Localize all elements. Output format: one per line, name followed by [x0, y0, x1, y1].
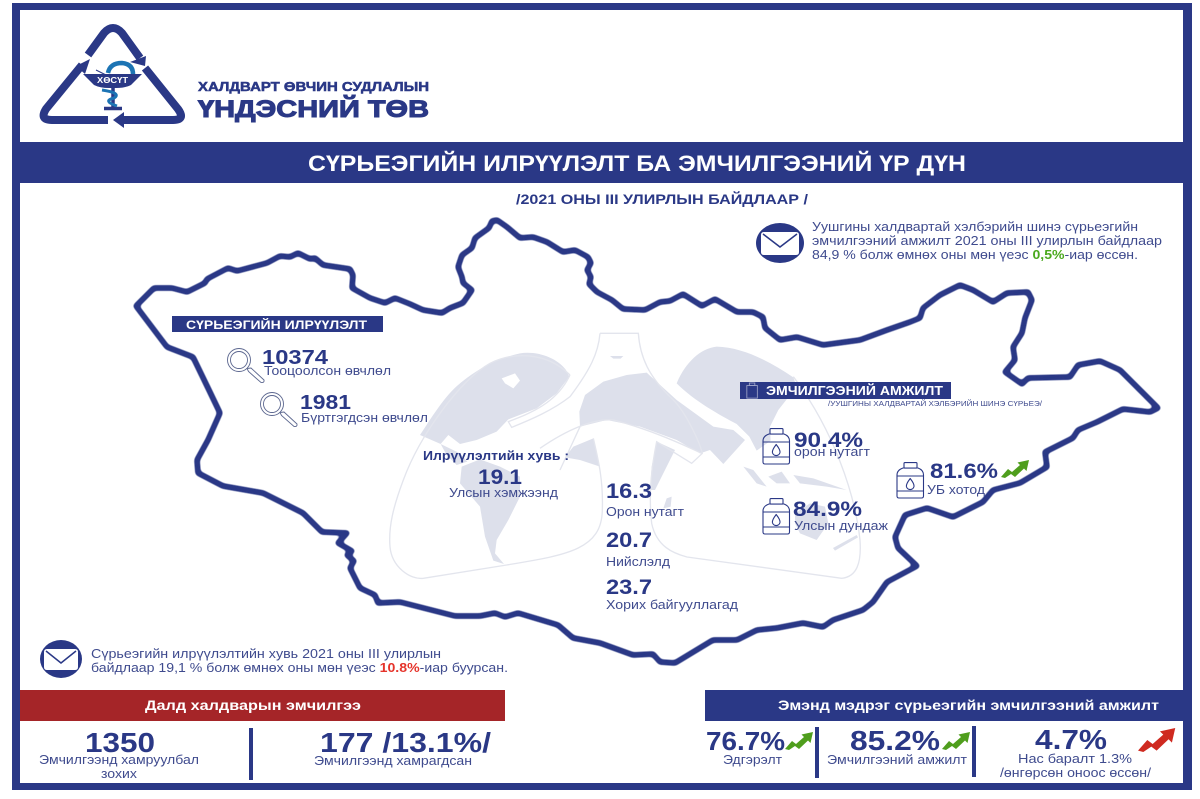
stat: national average treatment success: [763, 498, 888, 534]
callout: detection decline: байдлаар 19,1 % болж өмнөх оны мөн үеэс 10.8%-иар буурсан.: [91, 660, 508, 675]
stat: prison rate: 23.7: [606, 576, 652, 599]
stat: capital rate: 20.7: [606, 529, 652, 552]
stat: national detection rate: Улсын хэмжээнд: [449, 485, 558, 500]
stat: treatment success rate: [827, 725, 970, 767]
stat: should be covered: [39, 727, 199, 781]
callout: treatment success: 84,9 % болж өмнөх оны мөн үеэс 0,5%-иар өссөн.: [812, 247, 1138, 262]
callout: treatment success: эмчилгээний амжилт 2021 оны III улирлын байдлаар: [812, 233, 1162, 248]
Mongolia border outline: [136, 220, 1158, 663]
stat: prison rate: Хорих байгууллагад: [606, 597, 738, 612]
stat: rural rate: Орон нутагт: [606, 504, 684, 519]
stat: mortality: Нас баралт 1.3%: [1018, 751, 1132, 766]
title band: СҮРЬЕЭГИЙН ИЛРҮҮЛЭЛТ БА ЭМЧИЛГЭЭНИЙ ҮР ДҮН: [308, 151, 966, 176]
panel: treatment success heading: /УУШГИНЫ ХАЛДВАРТАЙ ХЭЛБЭРИЙН ШИНЭ СҮРЬЕЭ/: [828, 399, 1042, 408]
stat: national detection rate: [423, 448, 569, 500]
stat: rural treatment success: [763, 429, 870, 464]
stat: Ulaanbaatar treatment success: 81.6%: [930, 460, 998, 483]
stat: estimated cases: [262, 347, 391, 378]
stat: should be covered: зохих: [101, 766, 138, 781]
logo: ХӨСҮТ: [97, 75, 129, 85]
stat: capital rate: [606, 529, 670, 569]
stat: Ulaanbaatar treatment success: УБ хотод: [927, 482, 985, 497]
stat: capital rate: Нийслэлд: [606, 554, 670, 569]
stat: prison rate: [606, 576, 738, 612]
callout: treatment success: [756, 219, 1162, 263]
panel: treatment success heading: [740, 382, 1042, 408]
panel: latent infection treatment: [20, 690, 505, 721]
stat: national detection rate: 19.1: [478, 466, 522, 489]
panel: detection: СҮРЬЕЭГИЙН ИЛРҮҮЛЭЛТ: [186, 317, 368, 332]
icon: magnifier registered: [260, 392, 297, 427]
callout: detection decline: Сүрьеэгийн илрүүлэлтийн хувь 2021 оны III улирлын: [91, 646, 441, 661]
icon: magnifier estimated: [228, 348, 264, 383]
stat: registered cases: 1981: [300, 392, 351, 414]
stat: rural treatment success: орон нутагт: [794, 444, 870, 459]
organisation name: ХАЛДВАРТ ӨВЧИН СУДЛАЛЫН: [198, 80, 429, 94]
stat: national average treatment success: Улсын дундаж: [794, 518, 888, 533]
stat: mortality: 4.7%: [1035, 724, 1107, 755]
stat: registered cases: [300, 392, 428, 425]
stat: treatment success rate: Эмчилгээний амжилт: [827, 752, 967, 767]
logo: [44, 28, 181, 128]
stat: should be covered: 1350: [85, 727, 155, 758]
panel: treatment success heading: ЭМЧИЛГЭЭНИЙ АМЖИЛТ: [766, 383, 943, 398]
stat: national detection rate: Илрүүлэлтийн хувь :: [423, 448, 569, 463]
title band: [20, 142, 1184, 183]
stat: national average treatment success: 84.9%: [793, 498, 862, 521]
stat: cure rate: 76.7%: [706, 726, 785, 756]
stat: Ulaanbaatar treatment success: [897, 460, 1029, 498]
stat: mortality: /өнгөрсөн оноос өссөн/: [1000, 765, 1151, 780]
callout: detection decline: [40, 640, 508, 678]
panel: latent infection treatment: Далд халдварын эмчилгээ: [145, 697, 361, 713]
stat: covered by treatment: [314, 727, 491, 768]
stat: treatment success rate: 85.2%: [850, 725, 940, 756]
stat: estimated cases: Тооцоолсон өвчлөл: [264, 363, 391, 378]
stat: covered by treatment: 177 /13.1%/: [320, 727, 491, 758]
stat: rural rate: [606, 480, 684, 519]
stat: cure rate: [706, 726, 813, 767]
lungs world map: [390, 333, 860, 578]
stat: rural treatment success: 90.4%: [794, 429, 863, 452]
stat: cure rate: Эдгэрэлт: [723, 752, 782, 767]
stat: covered by treatment: Эмчилгээнд хамрагдсан: [314, 753, 472, 768]
stat: registered cases: Бүртгэгдсэн өвчлөл: [301, 410, 428, 425]
subtitle: /2021 ОНЫ III УЛИРЛЫН БАЙДЛААР /: [516, 190, 808, 207]
stat: should be covered: Эмчилгээнд хамруулбал: [39, 752, 199, 767]
organisation name: ҮНДЭСНИЙ ТӨВ: [198, 95, 429, 123]
callout: treatment success: Уушгины халдвартай хэлбэрийн шинэ сүрьеэгийн: [812, 219, 1138, 234]
panel: drug sensitive treatment success: [705, 690, 1184, 721]
stat: estimated cases: 10374: [262, 347, 329, 369]
panel: drug sensitive treatment success: Эмэнд мэдрэг сүрьеэгийн эмчилгээний амжилт: [778, 697, 1159, 713]
stat: mortality: [1000, 724, 1175, 780]
organisation name: [198, 80, 429, 123]
panel: detection: [172, 316, 383, 332]
stat: rural rate: 16.3: [606, 480, 652, 503]
